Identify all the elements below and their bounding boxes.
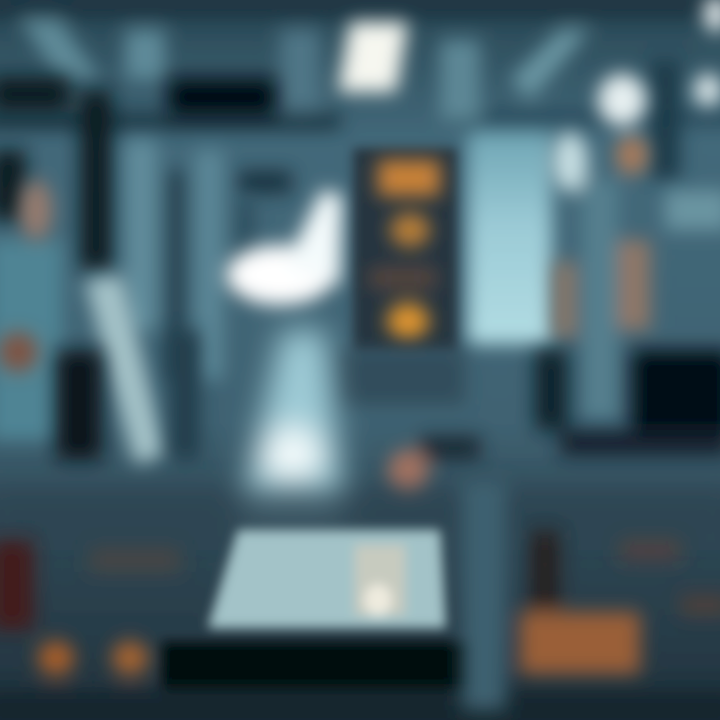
- panel lights: [370, 160, 440, 339]
- ceiling structure: [0, 0, 720, 180]
- left brown accents: [0, 180, 52, 372]
- bright floor: [208, 530, 446, 628]
- light diagonal beam left: [85, 275, 165, 465]
- right column and lights: [552, 0, 720, 420]
- dark lower left column: [56, 330, 200, 460]
- dark ceiling blobs: [0, 76, 292, 270]
- brown accent with dark cap: [388, 436, 480, 494]
- dark bottom slab: [162, 642, 478, 694]
- floor band: [0, 490, 720, 530]
- bottom left machinery: [0, 540, 720, 720]
- white window top: [338, 22, 408, 92]
- panel base: [335, 350, 465, 405]
- mid columns left: [0, 140, 255, 440]
- white cloud highlight: [226, 190, 342, 305]
- light pool under cloud: [240, 330, 345, 510]
- bottom right machinery: [462, 480, 720, 710]
- dark right machinery: [535, 350, 720, 456]
- light cyan column: [468, 132, 552, 344]
- central dark panel: [353, 148, 457, 352]
